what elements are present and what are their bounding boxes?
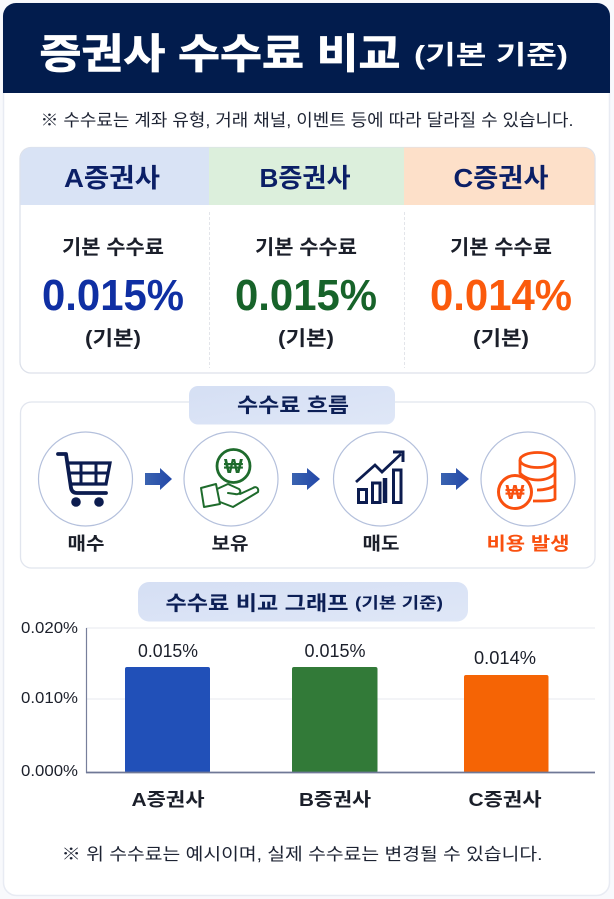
- bar: A: 0.015%: [138, 641, 198, 661]
- icon: hand with won coin: ₩: [224, 456, 243, 478]
- step: sell: 매도: [362, 534, 400, 554]
- header cell: B: B증권사: [260, 163, 351, 193]
- step: sell: [334, 432, 428, 554]
- column: C fee: 0.014%: [430, 271, 572, 320]
- top note: ※ 수수료는 계좌 유형, 거래 채널, 이벤트 등에 따라 달라질 수 있습니다.: [40, 111, 574, 130]
- bar: B: B증권사: [299, 789, 371, 810]
- bar chart: [21, 620, 595, 810]
- column: A fee: 0.015%: [42, 271, 184, 320]
- column: B fee: (기본): [278, 327, 334, 350]
- column: C fee: [430, 236, 572, 350]
- step: buy: [38, 432, 132, 554]
- flow heading pill: [189, 386, 395, 424]
- column: A fee: [42, 236, 184, 350]
- chart heading pill: (기본 기준): [355, 594, 443, 612]
- step: cost incurred: [481, 432, 575, 554]
- bottom note: ※ 위 수수료는 예시이며, 실제 수수료는 변경될 수 있습니다.: [62, 845, 542, 864]
- bar: C: 0.014%: [474, 648, 536, 668]
- header cell: A: [20, 148, 209, 205]
- bar: B: 0.015%: [304, 641, 366, 661]
- step: buy: 매수: [68, 534, 104, 554]
- column: C fee: 기본 수수료: [450, 236, 552, 259]
- bar: C: C증권사: [468, 789, 542, 810]
- arrow: [292, 468, 320, 490]
- column: B fee: 기본 수수료: [255, 236, 357, 259]
- chart heading pill: [138, 582, 468, 622]
- header cell: C: C증권사: [454, 163, 549, 193]
- header cell: C: [404, 148, 594, 205]
- y axis labels: [21, 620, 78, 780]
- bar: B: [292, 641, 378, 810]
- column: A fee: 기본 수수료: [62, 236, 164, 259]
- y axis labels: 0.020%: [21, 620, 78, 637]
- column: B fee: 0.015%: [235, 271, 377, 320]
- bar: C: [464, 648, 548, 810]
- y axis labels: 0.010%: [21, 690, 78, 707]
- header banner: [3, 3, 610, 93]
- column: A fee: (기본): [85, 327, 141, 350]
- step: hold: 보유: [212, 534, 248, 554]
- arrow: [441, 468, 469, 490]
- bar: A: [125, 641, 210, 810]
- y axis labels: 0.000%: [21, 763, 78, 780]
- header cell: A: A증권사: [64, 163, 160, 193]
- step: hold: [184, 432, 278, 554]
- bar: A: A증권사: [132, 789, 204, 810]
- header cell: B: [209, 148, 404, 205]
- panel: fee table: [20, 148, 595, 373]
- column: C fee: (기본): [473, 327, 529, 350]
- flow heading pill: 수수료 흐름: [237, 394, 349, 417]
- chart heading pill: 수수료 비교 그래프: [166, 592, 348, 615]
- icon: cart: [58, 454, 110, 507]
- step: cost incurred: 비용 발생: [486, 534, 570, 554]
- icon: coins: ₩: [506, 482, 525, 504]
- icon: rising chart: [356, 452, 403, 503]
- column: B fee: [235, 236, 377, 350]
- title: 증권사 수수료 비교: [40, 31, 400, 77]
- title suffix: (기본 기준): [414, 40, 568, 70]
- panel: fee flow: [20, 386, 595, 568]
- arrow: [145, 468, 172, 490]
